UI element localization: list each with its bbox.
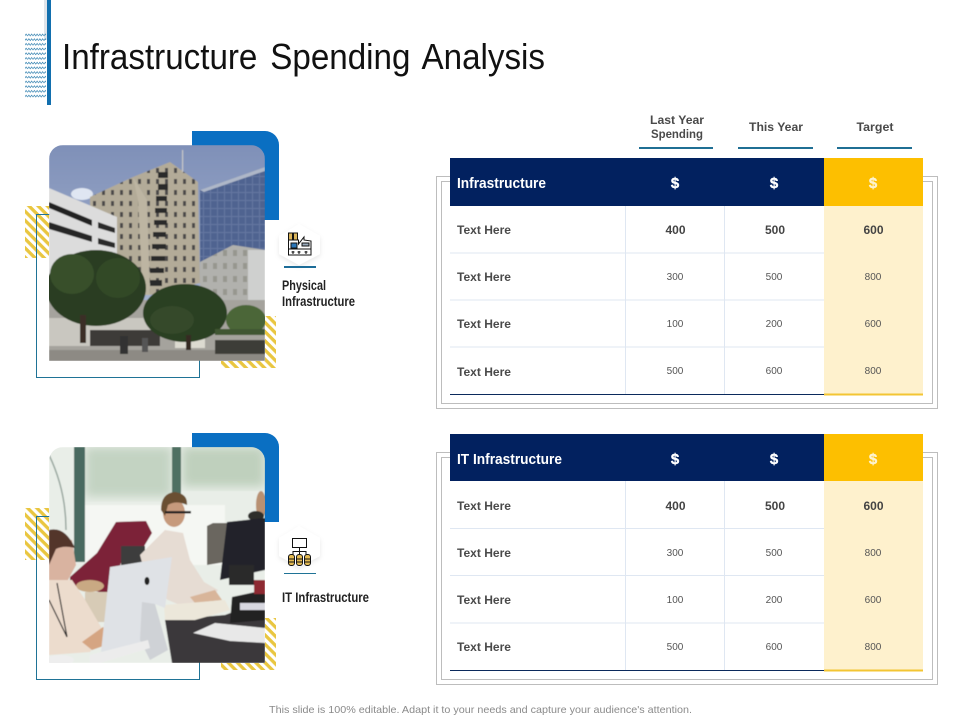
header target cell bbox=[824, 158, 923, 206]
label: physical infrastructure: Physical bbox=[282, 278, 326, 293]
yellow stripes bottom right bbox=[221, 316, 276, 368]
header text: $ bbox=[869, 175, 878, 192]
values other rows: 800 bbox=[865, 548, 882, 559]
values other rows bbox=[667, 272, 882, 377]
yellow stripes left bbox=[25, 508, 49, 560]
panel: infrastructure table bbox=[436, 158, 938, 408]
title accent: blue bar and wave pattern bbox=[25, 0, 51, 105]
values other rows: 500 bbox=[667, 366, 684, 377]
values first row bbox=[665, 499, 884, 513]
header text: $ bbox=[770, 175, 779, 192]
teal outline frame bbox=[36, 516, 200, 680]
row labels: Text Here bbox=[457, 499, 511, 513]
table body background bbox=[450, 206, 824, 394]
footer note: This slide is 100% editable. Adapt it to your needs and capture your audience's attention. bbox=[269, 704, 692, 716]
yellow stripes left bbox=[25, 206, 49, 258]
column headings bbox=[639, 113, 912, 149]
header band bbox=[450, 434, 824, 481]
row labels bbox=[457, 499, 511, 654]
icon: factory bbox=[279, 224, 320, 265]
values other rows: 800 bbox=[865, 272, 882, 283]
header text: $ bbox=[671, 451, 680, 468]
values other rows: 100 bbox=[667, 319, 684, 330]
values first row: 600 bbox=[863, 499, 884, 513]
row labels: Text Here bbox=[457, 223, 511, 237]
values first row bbox=[665, 223, 884, 237]
label: IT infrastructure: IT Infrastructure bbox=[282, 590, 369, 605]
header text: $ bbox=[869, 451, 878, 468]
values other rows: 100 bbox=[667, 595, 684, 606]
photo: buildings bbox=[46, 145, 266, 361]
table frames bbox=[436, 452, 938, 684]
panel: physical infrastructure visual bbox=[25, 131, 279, 378]
bottom rules bbox=[450, 394, 923, 396]
title: Infrastructure Spending Analysis bbox=[62, 36, 545, 77]
values other rows bbox=[667, 548, 882, 653]
values first row: 600 bbox=[863, 223, 884, 237]
values other rows: 300 bbox=[667, 548, 684, 559]
target column tint bbox=[824, 206, 923, 394]
row labels: Text Here bbox=[457, 546, 511, 560]
row labels bbox=[457, 223, 511, 379]
values other rows: 800 bbox=[865, 366, 882, 377]
header band bbox=[450, 158, 824, 206]
header text: IT Infrastructure bbox=[457, 451, 562, 468]
heading: last year spending: Last Year bbox=[650, 113, 704, 127]
values first row: 400 bbox=[665, 223, 686, 237]
blue corner block bbox=[192, 131, 279, 220]
heading: this year: This Year bbox=[749, 120, 803, 134]
panel: IT infrastructure table bbox=[436, 434, 938, 684]
values other rows: 500 bbox=[766, 548, 783, 559]
target column tint bbox=[824, 481, 923, 670]
values first row: 400 bbox=[665, 499, 686, 513]
values other rows: 500 bbox=[667, 642, 684, 653]
blue corner block bbox=[192, 433, 279, 522]
values other rows: 600 bbox=[766, 642, 783, 653]
values other rows: 200 bbox=[766, 595, 783, 606]
values other rows: 600 bbox=[766, 366, 783, 377]
label: physical infrastructure bbox=[282, 278, 355, 309]
heading: target bbox=[837, 120, 912, 149]
values other rows: 800 bbox=[865, 642, 882, 653]
header text bbox=[457, 451, 878, 468]
header text: $ bbox=[770, 451, 779, 468]
values first row: 500 bbox=[765, 223, 785, 237]
header text: $ bbox=[671, 175, 680, 192]
values other rows: 600 bbox=[865, 319, 882, 330]
heading: target: Target bbox=[856, 120, 894, 134]
teal outline frame bbox=[36, 214, 200, 378]
heading: this year bbox=[738, 120, 813, 149]
photo: office workers bbox=[46, 447, 266, 665]
icon underline bbox=[284, 573, 316, 574]
values other rows: 300 bbox=[667, 272, 684, 283]
row labels: Text Here bbox=[457, 270, 511, 284]
heading: last year spending: Spending bbox=[651, 127, 703, 141]
values other rows: 600 bbox=[865, 595, 882, 606]
heading: last year spending bbox=[639, 113, 713, 149]
bottom rules bbox=[450, 670, 923, 672]
values first row: 500 bbox=[765, 499, 785, 513]
row labels: Text Here bbox=[457, 640, 511, 654]
yellow stripes bottom right bbox=[221, 618, 276, 670]
values other rows: 200 bbox=[766, 319, 783, 330]
icon underline bbox=[284, 266, 316, 268]
table body background bbox=[450, 481, 824, 670]
values other rows: 500 bbox=[766, 272, 783, 283]
row labels: Text Here bbox=[457, 365, 511, 379]
icon: network database bbox=[279, 526, 320, 567]
header text bbox=[457, 175, 878, 192]
table frames bbox=[436, 176, 938, 408]
header target cell bbox=[824, 434, 923, 481]
panel: IT infrastructure visual bbox=[25, 433, 279, 680]
header text: Infrastructure bbox=[457, 175, 546, 192]
label: physical infrastructure: Infrastructure bbox=[282, 294, 355, 309]
row labels: Text Here bbox=[457, 317, 511, 331]
row labels: Text Here bbox=[457, 593, 511, 607]
